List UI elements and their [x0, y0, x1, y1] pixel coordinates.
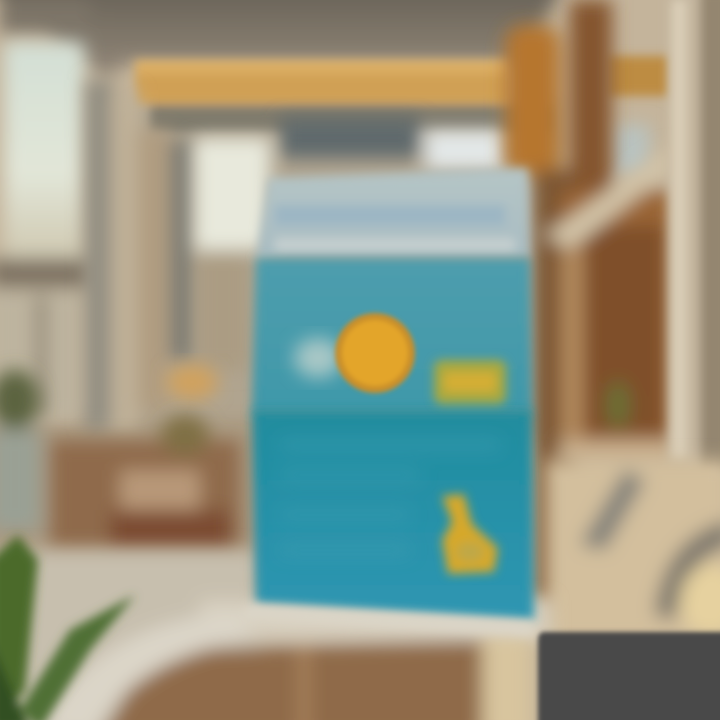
- pale glow beside circle: [294, 338, 342, 378]
- icon: yellow figure: [442, 494, 498, 574]
- poster: [240, 168, 534, 636]
- poster header band: [256, 168, 530, 258]
- center windows: [194, 118, 650, 370]
- poster middle panel: [252, 258, 532, 414]
- plant: [0, 535, 135, 720]
- left window: [0, 42, 90, 420]
- floor: [0, 550, 550, 720]
- poster lower panel: [252, 410, 534, 620]
- lamp glow: [166, 364, 218, 400]
- dark grey box: [538, 632, 720, 720]
- orange ceiling beam: [135, 56, 670, 132]
- sofa: [545, 460, 720, 640]
- icon: orange circle: [335, 313, 415, 393]
- left seating and furniture: [0, 370, 240, 550]
- poster bottom edge highlight: [240, 604, 534, 636]
- right wooden shelving: [505, 0, 675, 600]
- right pillar: [668, 0, 720, 470]
- poster faint text rows: [280, 440, 500, 555]
- pillars: [86, 80, 194, 430]
- ceiling: [0, 0, 570, 78]
- icon: yellow rounded badge: [434, 360, 506, 404]
